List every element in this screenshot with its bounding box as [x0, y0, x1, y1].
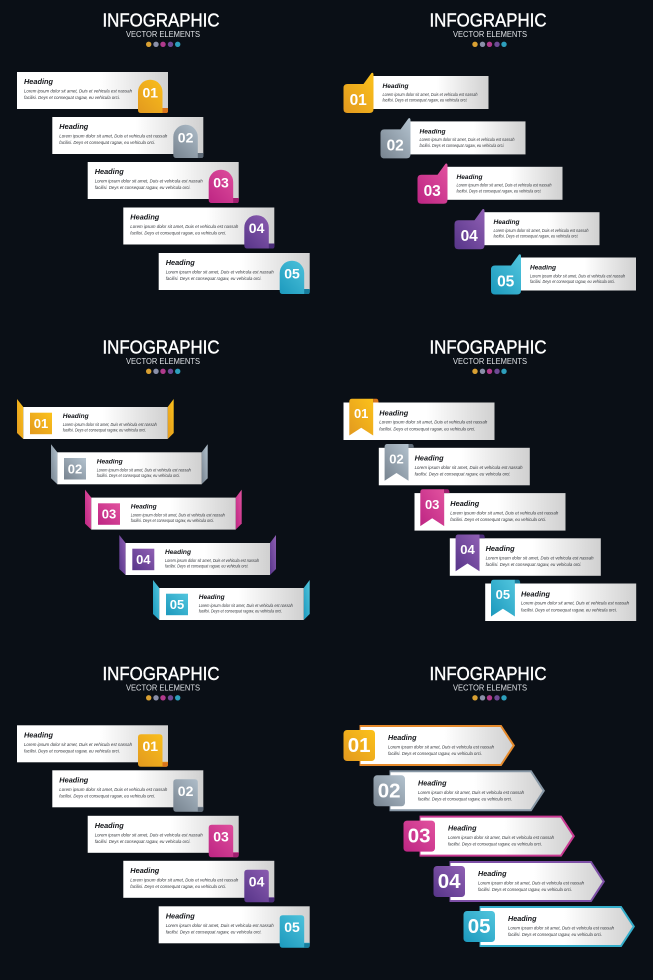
panel 3: winged banner steps: [17, 399, 310, 620]
step 01: [344, 725, 515, 766]
step 05: Heading: [166, 258, 195, 267]
step 02: 02: [389, 451, 404, 466]
step 01: facilisi. Deys et consequat ragaw, eu vehicula orci.: [388, 751, 482, 756]
step 04: Heading: [130, 866, 160, 875]
step 02: [380, 118, 526, 158]
step 02: [379, 444, 530, 485]
step 01: Heading: [382, 83, 409, 90]
step 01: Lorem ipsum dolor sit amet, Duis et vehicula est nassah: [63, 422, 157, 427]
step 03: facilisi. Deys et consequat ragaw, eu vehicula orci.: [95, 185, 191, 190]
header: middle right: [430, 338, 546, 374]
step 02: [52, 117, 203, 158]
step 05: Lorem ipsum dolor sit amet, Duis et vehicula est nassah: [199, 603, 293, 608]
header: middle right: VECTOR ELEMENTS: [453, 356, 527, 366]
step 04: Heading: [494, 219, 520, 226]
step 03: facilisi. Deys et consequat ragaw, eu vehicula orci.: [456, 188, 542, 193]
step 03: 03: [408, 825, 431, 848]
step 05: Lorem ipsum dolor sit amet, Duis et vehicula est nassah: [508, 926, 614, 930]
step 04: facilisi. Deys et consequat ragaw, eu vehicula orci.: [165, 564, 249, 568]
step 05: Heading: [530, 264, 557, 272]
step 04: 04: [249, 220, 265, 236]
step 05: facilisi. Deys et consequat ragaw, eu vehicula orci.: [530, 279, 615, 284]
step 02: facilisi. Deys et consequat ragaw, eu vehicula orci.: [415, 472, 511, 477]
step 05: facilisi. Deys et consequat ragaw, eu vehicula orci.: [166, 929, 262, 934]
step 01: Heading: [24, 730, 53, 739]
step 03: Lorem ipsum dolor sit amet, Duis et vehicula est nassah: [450, 510, 559, 515]
step 03: Lorem ipsum dolor sit amet, Duis et vehicula est nassah: [456, 183, 552, 188]
step 01: Lorem ipsum dolor sit amet, Duis et vehicula est nassah: [388, 744, 494, 750]
step 05: Heading: [166, 911, 195, 920]
step 03: Lorem ipsum dolor sit amet, Duis et vehicula est nassah: [448, 835, 554, 840]
header: top left: [102, 10, 220, 47]
step 03: Lorem ipsum dolor sit amet, Duis et vehicula est nassah: [95, 178, 203, 184]
step 01: Heading: [388, 733, 417, 742]
step 05: 05: [170, 597, 184, 612]
step 04: [454, 209, 600, 249]
step 05: Lorem ipsum dolor sit amet, Duis et vehicula est nassah: [166, 923, 274, 928]
step 05: facilisi. Deys et consequat ragaw, eu vehicula orci.: [166, 276, 262, 281]
step 02: Heading: [59, 122, 89, 131]
step 03: Heading: [456, 174, 483, 181]
step 04: facilisi. Deys et consequat ragaw, eu vehicula orci.: [494, 234, 578, 239]
step 01: [344, 399, 494, 440]
step 03: 03: [213, 828, 229, 844]
step 03: 03: [424, 183, 441, 200]
step 04: 04: [438, 870, 461, 893]
step 03: facilisi. Deys et consequat ragaw, eu vehicula orci.: [448, 842, 542, 847]
step 04: Heading: [478, 869, 507, 878]
step 04: [450, 534, 601, 576]
step 03: 03: [425, 497, 439, 512]
header: bottom right: INFOGRAPHIC: [430, 664, 546, 684]
step 01: Lorem ipsum dolor sit amet, Duis et vehicula est nassah: [382, 92, 478, 97]
step 02: Lorem ipsum dolor sit amet, Duis et vehicula est nassah: [420, 137, 515, 142]
step 03: [88, 816, 239, 857]
panel 4: bookmark ribbon steps: [344, 399, 636, 621]
step 03: Heading: [95, 167, 124, 176]
step 02: facilisi. Deys et consequat ragaw, eu vehicula orci.: [418, 796, 512, 801]
step 04: facilisi. Deys et consequat ragaw, eu vehicula orci.: [478, 887, 572, 892]
step 04: [119, 535, 276, 575]
step 05: [159, 253, 310, 294]
step 01: 01: [354, 406, 368, 421]
step 02: Heading: [420, 128, 446, 135]
step 05: [464, 906, 635, 947]
step 03: Lorem ipsum dolor sit amet, Duis et vehicula est nassah: [131, 513, 225, 518]
step 03: [418, 164, 562, 204]
step 03: facilisi. Deys et consequat ragaw, eu vehicula orci.: [450, 517, 546, 522]
step 02: 02: [387, 137, 404, 154]
step 03: [414, 489, 566, 531]
step 05: Lorem ipsum dolor sit amet, Duis et vehicula est nassah: [530, 273, 625, 278]
step 01: facilisi. Deys et consequat ragaw, eu vehicula orci.: [63, 428, 146, 432]
step 01: 01: [34, 416, 48, 431]
step 02: Lorem ipsum dolor sit amet, Duis et vehicula est nassah: [415, 465, 523, 470]
step 04: Lorem ipsum dolor sit amet, Duis et vehicula est nassah: [494, 228, 589, 233]
header: bottom left: INFOGRAPHIC: [102, 664, 220, 684]
step 01: [17, 725, 168, 767]
step 02: Heading: [418, 778, 447, 787]
step 05: 05: [284, 266, 300, 282]
panel 1: arched tab steps: [17, 72, 310, 294]
header: bottom right: VECTOR ELEMENTS: [453, 682, 527, 692]
step 04: Lorem ipsum dolor sit amet, Duis et vehicula est nassah: [130, 877, 239, 882]
step 05: 05: [468, 915, 491, 938]
step 02: Heading: [97, 458, 124, 465]
step 02: Lorem ipsum dolor sit amet, Duis et vehicula est nassah: [59, 134, 168, 138]
step 02: 02: [178, 130, 194, 146]
step 04: Heading: [130, 212, 160, 222]
panel 6: outlined arrow steps: [344, 725, 635, 947]
step 04: 04: [460, 542, 475, 557]
step 05: 05: [284, 919, 300, 935]
step 04: [123, 861, 274, 902]
step 01: Heading: [63, 413, 90, 420]
step 04: 04: [461, 228, 478, 245]
step 03: 03: [102, 507, 116, 522]
step 02: facilisi. Deys et consequat ragaw, eu vehicula orci.: [97, 473, 180, 478]
header: middle left: [102, 338, 220, 374]
header: top right: [430, 10, 546, 47]
step 02: facilisi. Deys et consequat ragaw, eu vehicula orci.: [59, 793, 155, 798]
step 01: Heading: [379, 408, 409, 417]
step 01: Lorem ipsum dolor sit amet, Duis et vehicula est nassah: [24, 742, 132, 747]
step 03: Heading: [131, 504, 158, 511]
step 05: [159, 906, 310, 948]
step 03: Heading: [450, 499, 480, 508]
step 04: [123, 208, 274, 248]
header: bottom left: [102, 664, 220, 700]
step 03: facilisi. Deys et consequat ragaw, eu vehicula orci.: [131, 518, 214, 523]
step 03: [404, 816, 575, 857]
step 04: 04: [136, 552, 151, 567]
step 04: facilisi. Deys et consequat ragaw, eu vehicula orci.: [130, 231, 226, 236]
step 04: Lorem ipsum dolor sit amet, Duis et vehicula est nassah: [478, 880, 584, 886]
panel 2: speech-tab steps: [344, 73, 636, 294]
header: middle left: INFOGRAPHIC: [102, 338, 220, 358]
step 03: Heading: [448, 824, 477, 833]
step 01: facilisi. Deys et consequat ragaw, eu vehicula orci.: [24, 748, 120, 753]
step 05: facilisi. Deys et consequat ragaw, eu vehicula orci.: [521, 607, 617, 612]
step 03: facilisi. Deys et consequat ragaw, eu vehicula orci.: [95, 839, 191, 844]
step 02: [374, 770, 545, 811]
step 01: [344, 73, 488, 113]
step 02: Lorem ipsum dolor sit amet, Duis et vehicula est nassah: [418, 790, 524, 795]
step 05: Heading: [508, 914, 537, 923]
step 02: 02: [68, 461, 82, 476]
step 01: facilisi. Deys et consequat ragaw, eu vehicula orci.: [24, 95, 120, 100]
step 05: Lorem ipsum dolor sit amet, Duis et vehicula est nassah: [166, 270, 274, 274]
step 05: Heading: [199, 594, 226, 601]
panel 5: rounded square tab steps: [17, 725, 310, 948]
step 04: Lorem ipsum dolor sit amet, Duis et vehicula est nassah: [165, 558, 259, 563]
step 02: facilisi. Deys et consequat ragaw, eu vehicula orci.: [420, 143, 504, 148]
step 01: Lorem ipsum dolor sit amet, Duis et vehicula est nassah: [24, 88, 132, 94]
header: middle right: INFOGRAPHIC: [430, 338, 546, 358]
step 04: Lorem ipsum dolor sit amet, Duis et vehicula est nassah: [130, 224, 239, 229]
step 05: [485, 580, 636, 621]
step 02: 02: [178, 783, 194, 799]
header: bottom left: VECTOR ELEMENTS: [126, 682, 200, 692]
step 04: facilisi. Deys et consequat ragaw, eu vehicula orci.: [486, 562, 582, 567]
header: top left: VECTOR ELEMENTS: [126, 29, 200, 39]
step 02: Lorem ipsum dolor sit amet, Duis et vehicula est nassah: [59, 787, 168, 792]
step 03: [85, 490, 242, 530]
step 05: facilisi. Deys et consequat ragaw, eu vehicula orci.: [508, 932, 602, 937]
step 05: Heading: [521, 589, 550, 598]
step 04: 04: [249, 873, 265, 889]
header: bottom right: [430, 664, 546, 700]
step 04: [434, 861, 605, 902]
step 02: Heading: [415, 454, 444, 463]
step 01: 01: [348, 734, 371, 757]
step 05: [153, 580, 310, 620]
step 01: [17, 72, 168, 113]
step 01: 01: [350, 92, 367, 109]
step 03: 03: [213, 174, 229, 190]
step 01: Heading: [24, 77, 53, 86]
step 05: facilisi. Deys et consequat ragaw, eu vehicula orci.: [199, 608, 282, 614]
step 02: facilisi. Deys et consequat ragaw, eu vehicula orci.: [59, 140, 155, 145]
step 01: Lorem ipsum dolor sit amet, Duis et vehicula est nassah: [379, 420, 488, 425]
step 05: [491, 254, 636, 294]
step 03: Lorem ipsum dolor sit amet, Duis et vehicula est nassah: [95, 832, 203, 837]
step 01: 01: [143, 738, 158, 754]
step 04: Heading: [165, 549, 192, 556]
step 05: Lorem ipsum dolor sit amet, Duis et vehicula est nassah: [521, 601, 629, 606]
header: top right: VECTOR ELEMENTS: [453, 29, 527, 39]
step 01: [17, 399, 174, 439]
step 02: 02: [378, 779, 401, 802]
step 05: 05: [497, 274, 515, 290]
step 03: [88, 162, 239, 203]
step 04: Lorem ipsum dolor sit amet, Duis et vehicula est nassah: [486, 555, 594, 560]
header: top left: INFOGRAPHIC: [102, 10, 220, 30]
step 02: Heading: [59, 775, 89, 784]
step 01: 01: [143, 84, 158, 100]
step 01: facilisi. Deys et consequat ragaw, eu vehicula orci.: [382, 98, 468, 102]
step 02: [52, 770, 203, 812]
header: middle left: VECTOR ELEMENTS: [126, 356, 200, 366]
step 04: facilisi. Deys et consequat ragaw, eu vehicula orci.: [130, 884, 226, 889]
step 02: Lorem ipsum dolor sit amet, Duis et vehicula est nassah: [97, 467, 191, 472]
header: top right: INFOGRAPHIC: [430, 10, 546, 30]
step 03: Heading: [95, 821, 124, 830]
step 01: facilisi. Deys et consequat ragaw, eu vehicula orci.: [379, 426, 475, 431]
step 05: 05: [496, 587, 510, 602]
step 02: [51, 444, 208, 484]
step 04: Heading: [486, 544, 515, 553]
